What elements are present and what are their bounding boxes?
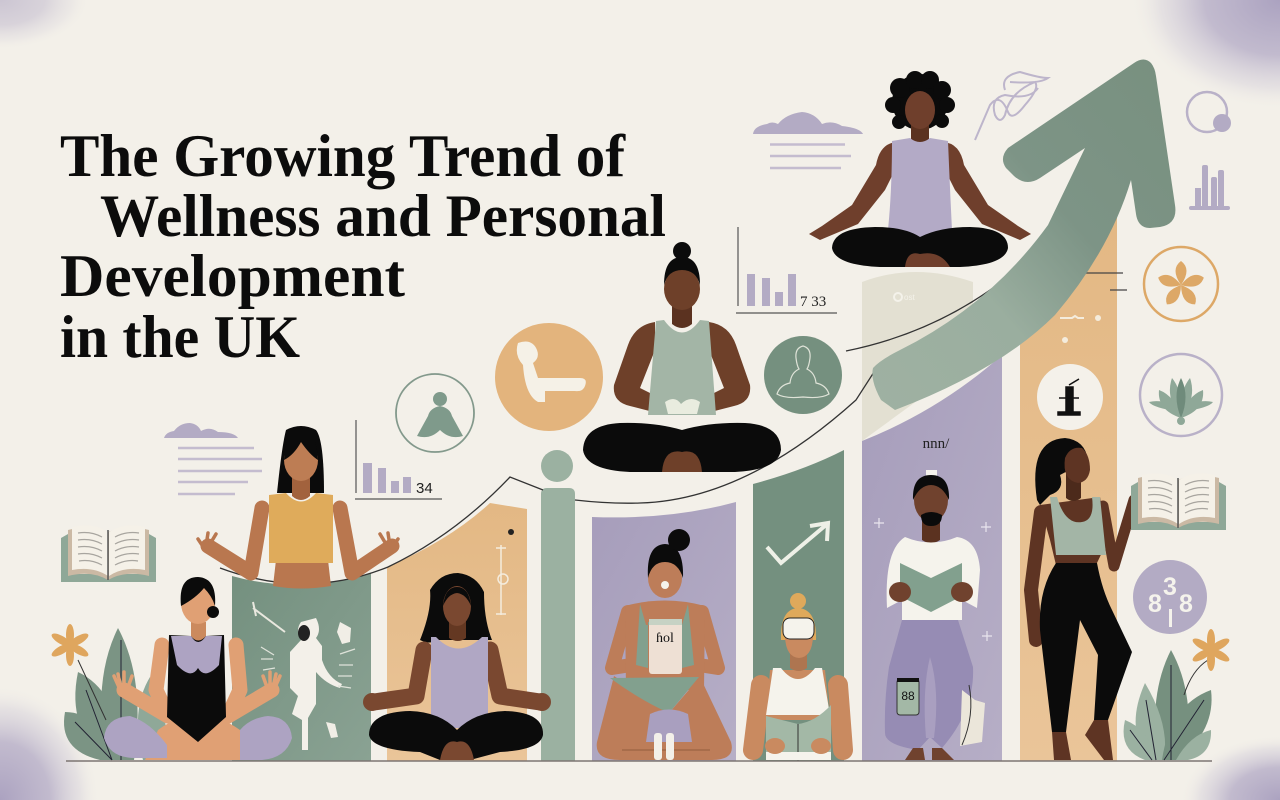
icon: cloud with lines left xyxy=(164,423,262,494)
icon: outlined circle with seated figure xyxy=(396,374,474,452)
figure: woman in lavender tank and black leggings xyxy=(363,573,551,760)
panel: lavender column with marks xyxy=(862,355,1002,761)
growth curve line xyxy=(220,260,1028,584)
bar chart: centre xyxy=(736,227,837,313)
icon: lavender number circle: 8 xyxy=(1148,590,1162,618)
icon: flower in amber ring xyxy=(1144,247,1218,321)
bar chart: left: 34 xyxy=(416,480,433,497)
panel: sage column with white figure xyxy=(232,573,371,761)
bar chart: left xyxy=(355,420,442,499)
icon: amber circle with white figure xyxy=(495,323,603,431)
icon: lavender number circle xyxy=(1133,560,1207,634)
title xyxy=(60,123,666,370)
panel: amber column xyxy=(387,503,527,761)
left plant and flower xyxy=(50,624,167,760)
icon: open book right xyxy=(1131,473,1226,530)
panel: amber column with icon xyxy=(1020,217,1127,761)
arrow: rising growth arrow xyxy=(872,60,1175,410)
panel: cream pedestal: ost xyxy=(904,293,915,302)
figure: woman in bun with pale book xyxy=(597,529,732,760)
panel: sage column with check arrow xyxy=(753,450,844,761)
panel: lavender column with marks: nnn/ xyxy=(923,436,950,452)
title: Wellness and Personal xyxy=(100,183,666,249)
icon: cloud with lines top xyxy=(753,112,863,168)
panel: lavender column xyxy=(592,502,736,761)
figure: woman in black with lavender trousers xyxy=(104,577,292,760)
icon: mini bars xyxy=(1189,165,1230,210)
figure: woman in yellow top xyxy=(198,426,398,588)
figure: standing woman in sage top and black leggings xyxy=(1031,438,1134,760)
panel: sage pillar with round head xyxy=(541,450,575,761)
figure: man reading with jar and bag xyxy=(885,470,985,760)
right plant and flower xyxy=(1124,629,1231,760)
icon: lavender number circle: 3 xyxy=(1163,573,1177,601)
icon: lavender number circle: 8 xyxy=(1179,590,1193,618)
icon: ring with dot xyxy=(1187,92,1231,132)
icon: squiggle xyxy=(975,72,1048,140)
bar chart: centre: 7 33 xyxy=(800,294,826,310)
title: Development xyxy=(60,243,405,309)
figure: woman in bun with pale book: ɦol xyxy=(656,631,674,646)
figure: blonde woman with VR headset xyxy=(753,593,843,761)
figure: woman with afro levitating xyxy=(809,71,1031,267)
figure: man reading with jar and bag: 88 xyxy=(901,689,915,703)
title: The Growing Trend of xyxy=(60,123,626,189)
panel: cream pedestal xyxy=(862,272,973,441)
icon: sage meditating circle xyxy=(764,336,842,414)
title: in the UK xyxy=(60,304,300,370)
figure: woman reading, sage tank, black trousers xyxy=(583,242,781,472)
floor line xyxy=(66,760,1212,762)
icon: open book left xyxy=(61,525,156,582)
icon: lotus in lavender ring xyxy=(1140,354,1222,436)
